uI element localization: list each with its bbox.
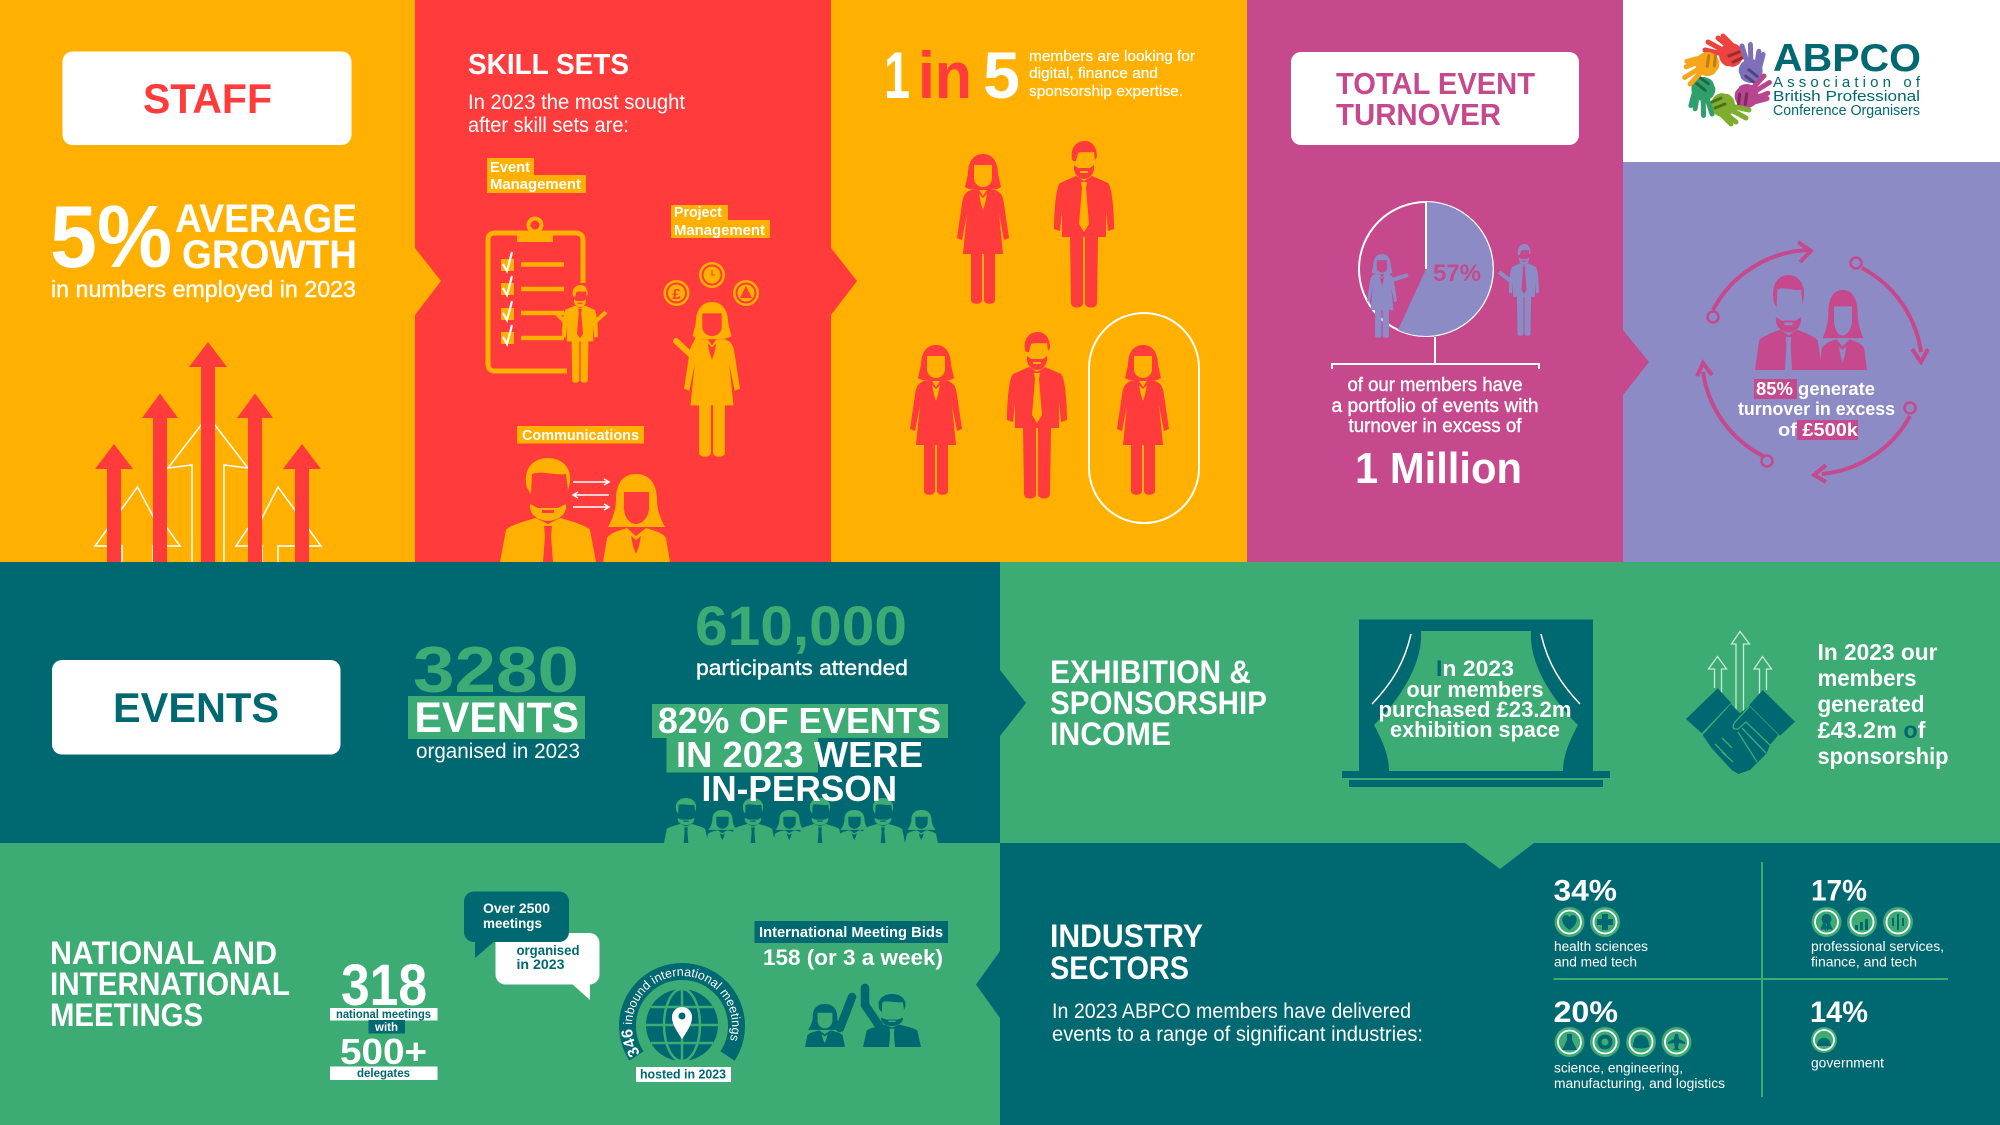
highlight pill (1089, 313, 1199, 523)
heading box: staff (62, 52, 352, 145)
heading: exhibition and sponsorship income: EXHIBITION & (1050, 654, 1251, 690)
label: project management: Project (674, 205, 722, 221)
panel: exhibition and sponsorship income (1000, 562, 2000, 869)
panel: 1 in 5 members (831, 0, 1247, 562)
arrow: to lavender panel (1623, 330, 1649, 395)
stat: 14% government: government (1811, 1056, 1884, 1070)
label: event management: Event (490, 160, 530, 176)
stat: 318 national meetings with 500+ delegates: delegates (357, 1068, 410, 1080)
stat: 20% science and engineering: 20% (1554, 996, 1618, 1029)
icon: juggled circles (664, 262, 759, 306)
chart: pie 57%: 57% (1433, 260, 1481, 287)
stat: 20% science and engineering: science, engineering, (1554, 1060, 1683, 1076)
icon: communicating people (500, 458, 670, 562)
stat: 82% of events in person: IN-PERSON (702, 768, 897, 809)
stat: 34% health: health sciences (1554, 939, 1648, 954)
stat: 5% average growth: AVERAGE (175, 197, 357, 241)
panel: sponsorship turnover 85% (1623, 162, 2000, 562)
label: event management: Management (490, 177, 581, 193)
heading: industry sectors: SECTORS (1050, 950, 1189, 986)
text: sponsorship generated: generated (1818, 691, 1924, 717)
arrow: from national meetings (976, 951, 1000, 1018)
stat: 318 national meetings with 500+ delegates: 318 (341, 953, 427, 1018)
heading: industry sectors: INDUSTRY (1050, 918, 1203, 954)
panel: events (0, 562, 1026, 843)
arrow: to skill sets panel (415, 248, 441, 315)
text: industry intro: In 2023 ABPCO members have delivered (1052, 1000, 1411, 1023)
icon: crowd (664, 798, 938, 843)
stat: 14% government (1810, 996, 1884, 1070)
stat: 34% health: 34% (1554, 874, 1617, 908)
badge: 346 inbound international meetings: 346 inbound international meetings (621, 968, 741, 1058)
heading box: events (52, 660, 340, 754)
stat: 5% average growth: 5% (50, 187, 172, 286)
stat: 82% of events in person: 82% OF EVENTS (658, 700, 941, 741)
stat: 3280 events (408, 633, 585, 763)
panel: logo (1623, 0, 2000, 162)
stat: 34% health: and med tech (1554, 954, 1637, 970)
stat: 1 in 5: 1 (884, 38, 910, 112)
stat: 610,000 participants: 610,000 (695, 594, 907, 657)
icon: circular arrows (1697, 242, 1928, 482)
speech bubble: over 2500 meetings: Over 2500 (483, 901, 550, 916)
text: portfolio description: of our members have (1348, 375, 1522, 396)
heading box: total event turnover (1291, 52, 1579, 145)
heading: exhibition and sponsorship income (1050, 654, 1267, 752)
heading box: events: EVENTS (113, 684, 279, 731)
stat: 17% professional services: 17% (1811, 874, 1867, 908)
icon: clipboard checklist (488, 218, 583, 371)
badge: 346 inbound international meetings: hosted in 2023 (640, 1068, 726, 1082)
stat: 17% professional services: professional services, (1811, 939, 1944, 954)
stat: 5% average growth: GROWTH (182, 233, 357, 277)
panel: skill sets (415, 0, 857, 562)
icon: high five (805, 988, 921, 1047)
text: industry intro: events to a range of significant industries: (1052, 1023, 1423, 1046)
icon: theatre stage (1342, 620, 1610, 787)
stat: 318 national meetings with 500+ delegates: with (374, 1022, 398, 1034)
panel: staff (0, 0, 441, 562)
arrow: to exhibition panel (1000, 670, 1026, 736)
stat: 17% professional services: finance, and tech (1811, 954, 1917, 970)
stat: 610,000 participants (695, 594, 908, 680)
stat: 34% health (1554, 874, 1648, 970)
stat: 20% science and engineering: manufacturing, and logistics (1554, 1076, 1725, 1091)
icon: people group (910, 141, 1169, 498)
logo wordmark: Conference Organisers (1773, 102, 1920, 119)
stat: 17% professional services (1811, 874, 1944, 970)
text: skill sets intro: after skill sets are: (468, 114, 629, 137)
text: 85% generate turnover (1738, 378, 1895, 440)
text: exhibition space: our members (1406, 677, 1544, 702)
heading: industry sectors (1050, 918, 1203, 986)
heading: national and international meetings (50, 935, 290, 1033)
text: skill sets intro (468, 91, 685, 137)
icon: man beside pie (1499, 244, 1539, 336)
icon: ABPCO hands ring (1678, 36, 1776, 124)
icon: two people (1755, 275, 1867, 370)
icon: red growth arrows (95, 342, 321, 562)
label: international meeting bids (754, 921, 948, 970)
text: exhibition space: exhibition space (1390, 717, 1560, 742)
stat: 318 national meetings with 500+ delegates (330, 953, 438, 1080)
text: industry intro (1052, 1000, 1423, 1046)
logo wordmark (1773, 37, 1921, 119)
text: sponsorship generated (1818, 639, 1948, 769)
text: members are looking for: digital, finance and (1029, 66, 1158, 82)
text: members are looking for: sponsorship expertise. (1029, 84, 1183, 100)
text: exhibition space (1378, 656, 1572, 742)
text: sponsorship generated: In 2023 our (1818, 639, 1938, 665)
speech bubble: over 2500 meetings: meetings (483, 916, 542, 931)
heading: exhibition and sponsorship income: INCOME (1050, 716, 1171, 752)
heading: national and international meetings: INTERNATIONAL (50, 966, 290, 1002)
stat: 82% of events in person (652, 700, 948, 809)
stat: 318 national meetings with 500+ delegates: 500+ (340, 1031, 427, 1072)
text: 85% generate turnover: turnover in excess (1738, 398, 1895, 419)
icon: handshake with arrows (1686, 632, 1795, 774)
logo wordmark: ABPCO (1773, 37, 1921, 80)
text: 85% generate turnover: of £500k (1778, 419, 1859, 440)
stat: 82% of events in person: IN 2023 WERE (676, 734, 923, 775)
heading: national and international meetings: NATIONAL AND (50, 935, 277, 971)
label: event management (487, 158, 586, 193)
label: project management: Management (674, 223, 765, 239)
logo wordmark: Association of (1773, 74, 1921, 91)
text: exhibition space: In 2023 (1436, 656, 1514, 681)
stat: 3280 events: 3280 (413, 633, 579, 706)
text: exhibition space: purchased £23.2m (1378, 697, 1572, 722)
speech bubble: organised in 2023: organised (516, 943, 580, 958)
text: members are looking for (1029, 49, 1195, 100)
panel: industry sectors (976, 843, 2000, 1125)
text: in numbers employed: in numbers employed in 2023 (51, 276, 356, 302)
text: sponsorship generated: sponsorship (1818, 743, 1948, 769)
label: project management (671, 205, 770, 239)
chart: pie 57% (1359, 202, 1493, 336)
stat: 20% science and engineering (1554, 996, 1725, 1091)
label: international meeting bids: 158 (or 3 a week) (763, 945, 943, 970)
label: international meeting bids: International Meeting Bids (759, 925, 943, 941)
text: portfolio description: a portfolio of events with (1332, 396, 1538, 417)
icon: woman beside pie (1367, 254, 1408, 338)
stat: 3280 events: EVENTS (414, 694, 579, 742)
heading box: total event turnover: TURNOVER (1336, 97, 1501, 132)
heading box: staff: STAFF (143, 75, 272, 122)
stat: 1 in 5: 5 (983, 38, 1020, 112)
heading: exhibition and sponsorship income: SPONSORSHIP (1050, 685, 1267, 721)
arrow: to industry sectors (1465, 843, 1534, 869)
stat: 1 in 5: in (918, 38, 972, 112)
stat: 1 Million: 1 Million (1355, 444, 1522, 493)
text: sponsorship generated: £43.2m of (1818, 717, 1926, 743)
heading: national and international meetings: MEETINGS (50, 997, 203, 1033)
speech bubble: organised in 2023: in 2023 (516, 957, 565, 972)
speech bubble: over 2500 meetings (464, 892, 569, 958)
label: communications: Communications (522, 428, 639, 444)
text: portfolio description (1332, 375, 1538, 437)
speech bubble: organised in 2023 (496, 933, 600, 1000)
text: sponsorship generated: members (1818, 665, 1916, 691)
text: members are looking for: members are looking for (1029, 49, 1195, 65)
stat: 14% government: 14% (1810, 996, 1868, 1029)
text: skill sets intro: In 2023 the most sought (468, 91, 685, 114)
stat: 5% average growth (50, 187, 357, 286)
stat: 1 in 5 (884, 38, 1020, 112)
logo wordmark: British Professional (1773, 88, 1920, 105)
panel: total event turnover (1247, 0, 1649, 562)
icon: man with checklist (555, 285, 606, 383)
icon: outline arrows (95, 416, 321, 562)
text: portfolio description: turnover in excess of (1348, 416, 1522, 437)
stat: 3280 events: organised in 2023 (416, 740, 580, 763)
stat: 610,000 participants: participants attended (696, 656, 908, 680)
icon: juggled circles: £ (672, 286, 681, 303)
icon: woman juggling (676, 302, 740, 457)
panel: national and international meetings (0, 843, 1000, 1125)
arrow: to 1 in 5 panel (831, 248, 857, 315)
heading: skill sets: SKILL SETS (468, 49, 629, 81)
text: 85% generate turnover: 85% generate (1756, 378, 1875, 399)
stat: 318 national meetings with 500+ delegates: national meetings (336, 1009, 431, 1021)
heading box: total event turnover: TOTAL EVENT (1336, 66, 1535, 101)
